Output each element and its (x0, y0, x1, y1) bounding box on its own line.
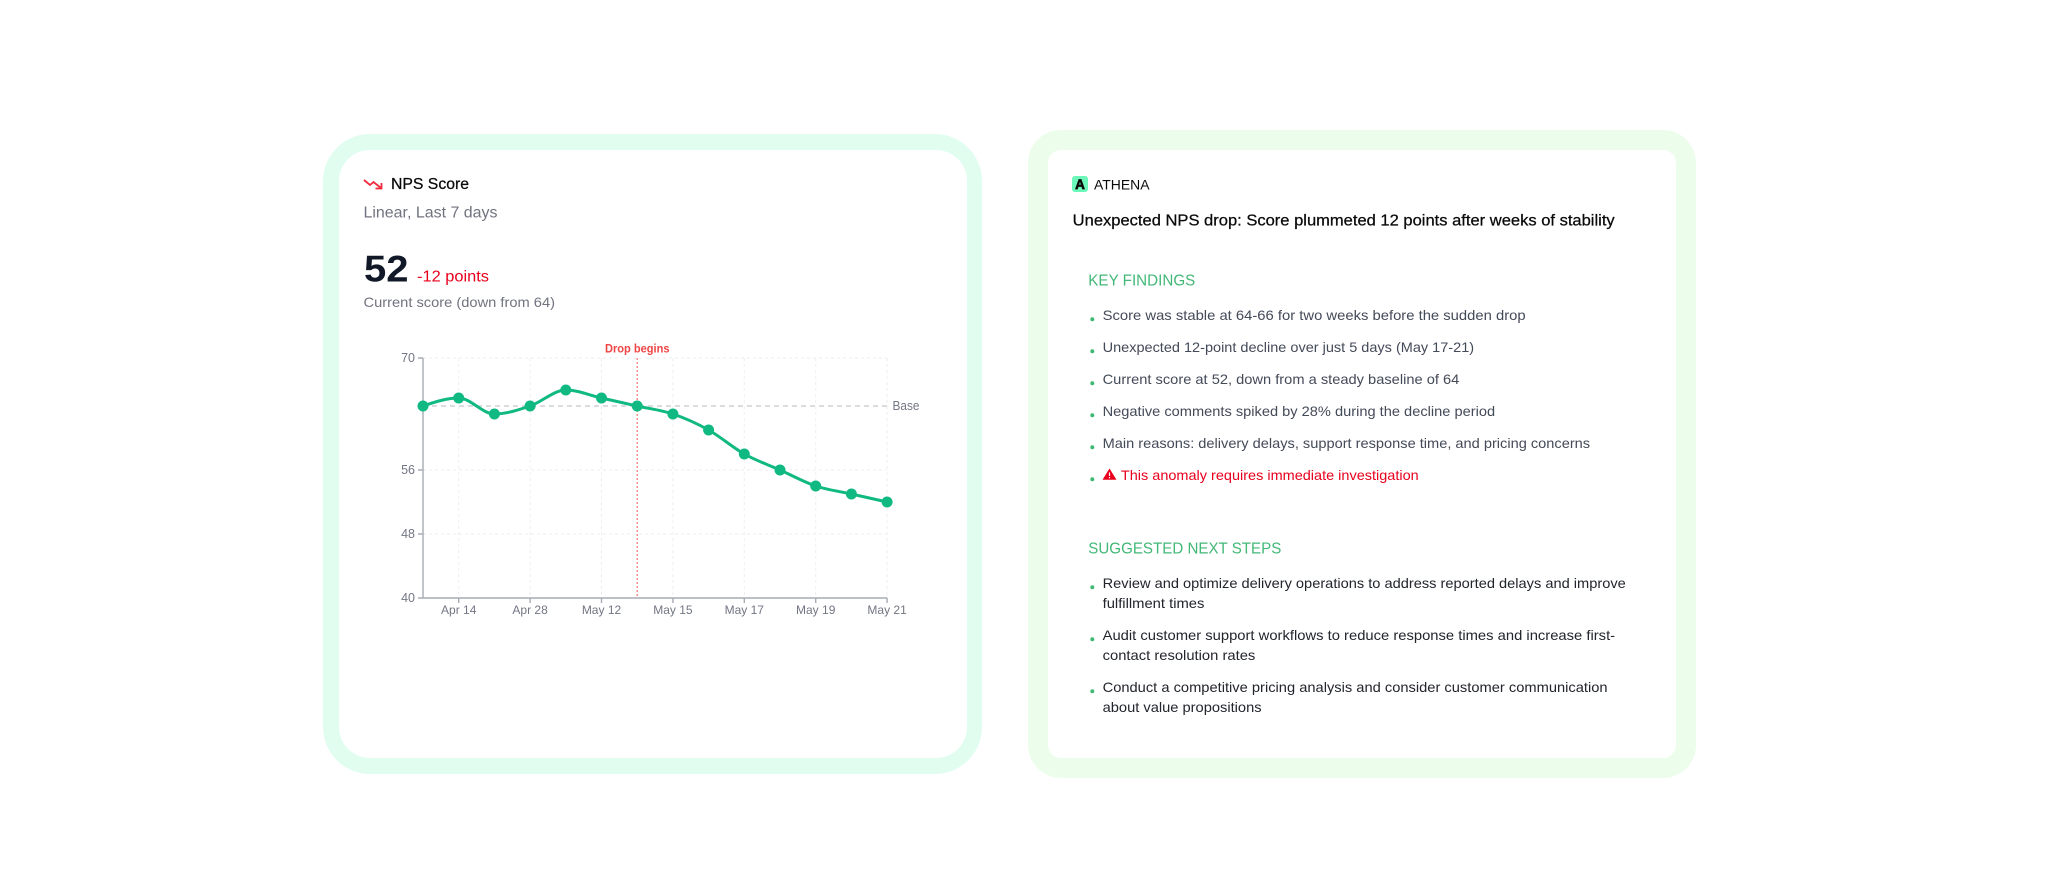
headline: Unexpected NPS drop: Score plummeted 12 points after weeks of stability (1073, 212, 1615, 230)
x axis labels: May 17 (725, 603, 764, 617)
drop begins marker: Drop begins (605, 344, 670, 356)
step 3: Conduct a competitive pricing analysis and consider customer communication (1103, 679, 1608, 695)
y axis labels: 48 (401, 527, 415, 541)
panel: NPS score chart card (323, 134, 982, 774)
x axis labels: Apr 14 (441, 603, 477, 617)
axes (418, 358, 887, 603)
brand name: ATHENA (1094, 176, 1150, 192)
finding 5: Main reasons: delivery delays, support response time, and pricing concerns (1103, 435, 1590, 451)
finding 6: anomaly warning: This anomaly requires immediate investigation (1121, 467, 1419, 483)
metric: current score: 52 (364, 248, 408, 290)
icon: Athena logo (1072, 176, 1088, 192)
step 2: Audit customer support workflows to reduce response times and increase first- (1103, 627, 1615, 643)
x axis labels: May 19 (796, 603, 836, 617)
y axis labels: 56 (401, 463, 415, 477)
y axis labels: 40 (401, 591, 415, 605)
x axis labels: May 21 (867, 603, 907, 617)
heading: suggested next steps: SUGGESTED NEXT STEPS (1088, 540, 1281, 558)
x axis labels: May 12 (582, 603, 621, 617)
bullet markers (1090, 585, 1094, 693)
finding 1: Score was stable at 64-66 for two weeks before the sudden drop (1103, 307, 1526, 323)
x axis labels: Apr 28 (512, 603, 548, 617)
section: key findings (1088, 272, 1590, 483)
step 3: about value propositions (1103, 699, 1262, 715)
bullet markers (1090, 317, 1094, 481)
step 1: Review and optimize delivery operations to address reported delays and improve (1103, 575, 1626, 591)
step 1: fulfillment times (1103, 595, 1204, 611)
data points (418, 384, 893, 508)
line chart: NPS over time (401, 344, 920, 617)
y axis labels: 70 (401, 351, 415, 365)
section: suggested next steps (1088, 540, 1626, 715)
metric caption: Current score (down from 64) (364, 294, 555, 310)
finding 3: Current score at 52, down from a steady baseline of 64 (1103, 371, 1460, 387)
panel: Athena analysis card (1028, 130, 1696, 778)
icon: Athena logo: A (1075, 177, 1085, 192)
step 2 (1103, 627, 1615, 663)
baseline reference line: Base (892, 399, 920, 413)
metric: change in points: -12 points (417, 268, 489, 286)
step 3 (1103, 679, 1608, 715)
step 2: contact resolution rates (1103, 647, 1255, 663)
step 1 (1103, 575, 1626, 611)
subtitle: Linear, Last 7 days (364, 204, 498, 222)
finding 2: Unexpected 12-point decline over just 5 days (May 17-21) (1103, 339, 1474, 355)
icon: trending down arrow (364, 180, 382, 188)
finding 4: Negative comments spiked by 28% during the decline period (1103, 403, 1495, 419)
data line (423, 390, 887, 502)
x axis labels (441, 603, 907, 617)
heading: key findings: KEY FINDINGS (1088, 272, 1195, 290)
y axis labels (401, 351, 415, 605)
icon: warning triangle (1103, 469, 1116, 480)
x axis labels: May 15 (653, 603, 693, 617)
heading: NPS Score: NPS Score (391, 176, 469, 193)
